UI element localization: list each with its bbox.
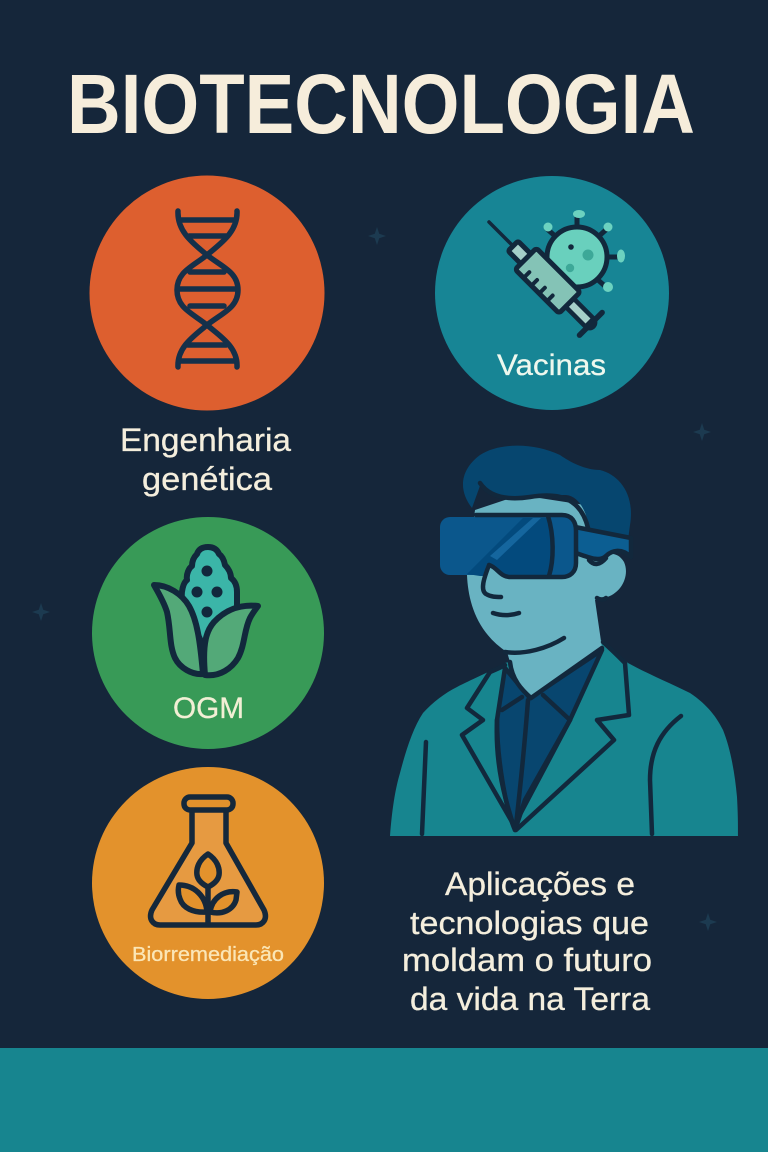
circle: vacinas (435, 176, 669, 410)
icon: flask with plant (151, 797, 265, 925)
facial features (483, 558, 606, 653)
icon: corn (154, 547, 258, 675)
panel: engenharia genética (90, 176, 324, 497)
jacket lapels and seams (422, 642, 681, 834)
label: engenharia genética: Engenharia (120, 422, 291, 458)
icon: DNA helix (177, 211, 238, 367)
panel: biorremediação (92, 767, 324, 999)
tagline (402, 866, 652, 1017)
footer band (0, 1048, 768, 1152)
title: BIOTECNOLOGIA (67, 57, 695, 151)
panel: vacinas (435, 176, 669, 410)
circle: biorremediação (92, 767, 324, 999)
tagline: tecnologias que (410, 905, 649, 941)
neck and face (467, 495, 626, 698)
panel: OGM (92, 517, 324, 749)
circle: engenharia genética (90, 176, 324, 410)
hair (463, 446, 631, 540)
label: engenharia genética (120, 422, 291, 497)
tagline: Aplicações e (445, 866, 635, 902)
icon: virus and syringe (478, 210, 625, 335)
tagline: moldam o futuro (402, 942, 652, 978)
icon: syringe (478, 211, 602, 335)
illustration: scientist with VR headset (390, 446, 738, 836)
icon: virus (544, 210, 625, 292)
circle: OGM (92, 517, 324, 749)
label: biorremediação: Biorremediação (132, 944, 284, 966)
shirt (497, 650, 602, 830)
label: vacinas: Vacinas (497, 349, 606, 382)
VR headset (440, 515, 631, 579)
label: engenharia genética: genética (142, 461, 272, 497)
jacket (390, 640, 738, 836)
tagline: da vida na Terra (410, 981, 650, 1017)
label: OGM: OGM (173, 692, 244, 725)
